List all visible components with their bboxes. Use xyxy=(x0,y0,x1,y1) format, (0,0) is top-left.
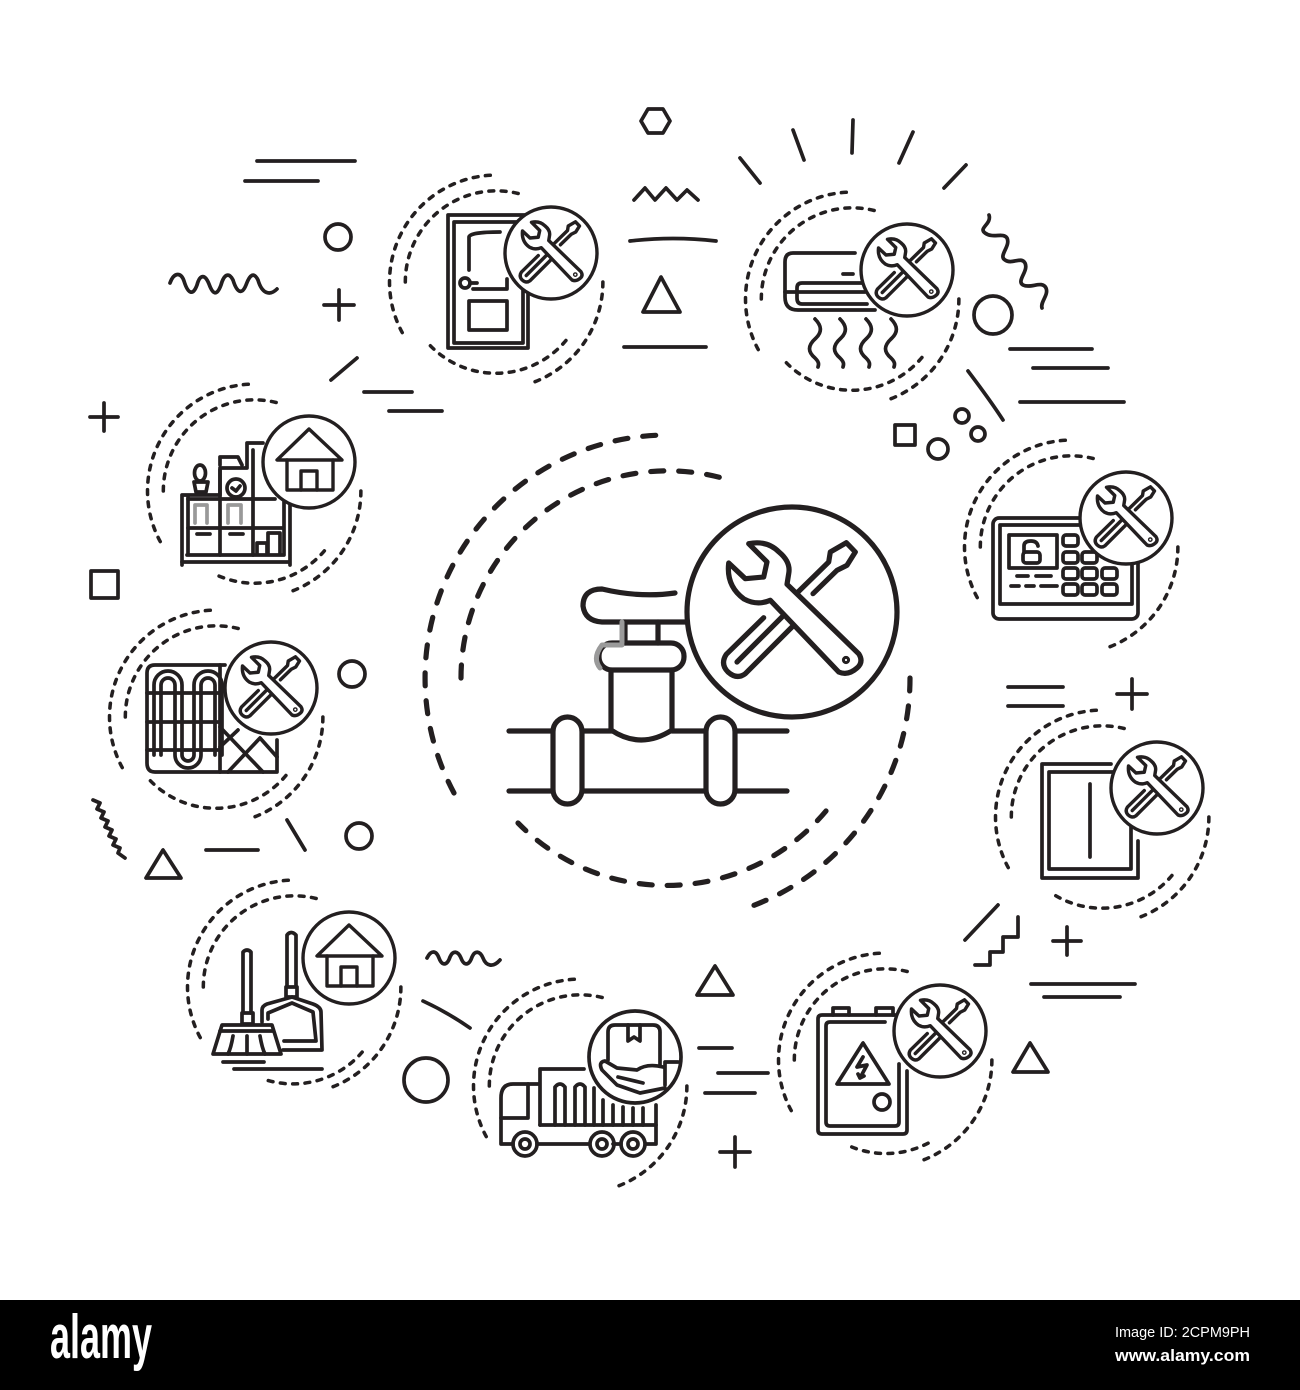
dashed rings xyxy=(390,175,603,383)
tools badge xyxy=(687,507,897,717)
keypad panel xyxy=(993,518,1138,619)
dashed orbit rings around central icon xyxy=(425,435,910,908)
item: delivery truck xyxy=(474,979,687,1187)
item: electrical box repair xyxy=(779,953,992,1161)
dashed rings xyxy=(474,979,687,1187)
logo: alamy xyxy=(50,1303,152,1372)
tools badge xyxy=(861,224,953,316)
item: broom and dustpan cleaning xyxy=(188,880,401,1088)
tools badge xyxy=(894,985,986,1077)
dashed rings xyxy=(188,880,401,1088)
pipe with valve xyxy=(509,589,787,804)
tools badge xyxy=(225,642,317,734)
item: home furniture cabinet xyxy=(148,384,361,592)
truck xyxy=(501,1069,656,1156)
dashed rings xyxy=(965,440,1178,648)
dashed rings xyxy=(746,192,959,400)
dashed rings xyxy=(779,953,992,1161)
footer bar xyxy=(0,1300,1300,1390)
tools badge xyxy=(1080,472,1172,564)
dashed rings xyxy=(110,610,323,818)
central icon: pipe valve with repair tools xyxy=(425,435,910,908)
decorative shapes xyxy=(90,109,1147,1167)
item: underfloor heating repair xyxy=(110,610,323,818)
cabinet xyxy=(182,443,290,565)
broom and dustpan xyxy=(213,932,322,1069)
image id: Image ID: 2CPM9PH xyxy=(1115,1324,1250,1341)
item: window repair xyxy=(996,710,1209,918)
tools badge xyxy=(505,207,597,299)
electrical box xyxy=(818,1008,907,1134)
window xyxy=(1042,764,1138,878)
air conditioner xyxy=(785,253,896,367)
box in hand badge xyxy=(589,1011,681,1103)
house badge xyxy=(263,416,355,508)
door xyxy=(448,215,528,348)
tools badge xyxy=(1111,742,1203,834)
item: security panel repair xyxy=(965,440,1178,648)
item: air conditioner repair xyxy=(746,192,959,400)
dashed rings xyxy=(148,384,361,592)
dashed rings xyxy=(996,710,1209,918)
item: door repair xyxy=(390,175,603,383)
website: www.alamy.com xyxy=(1114,1346,1250,1365)
house badge xyxy=(303,912,395,1004)
heating mat xyxy=(147,665,277,772)
